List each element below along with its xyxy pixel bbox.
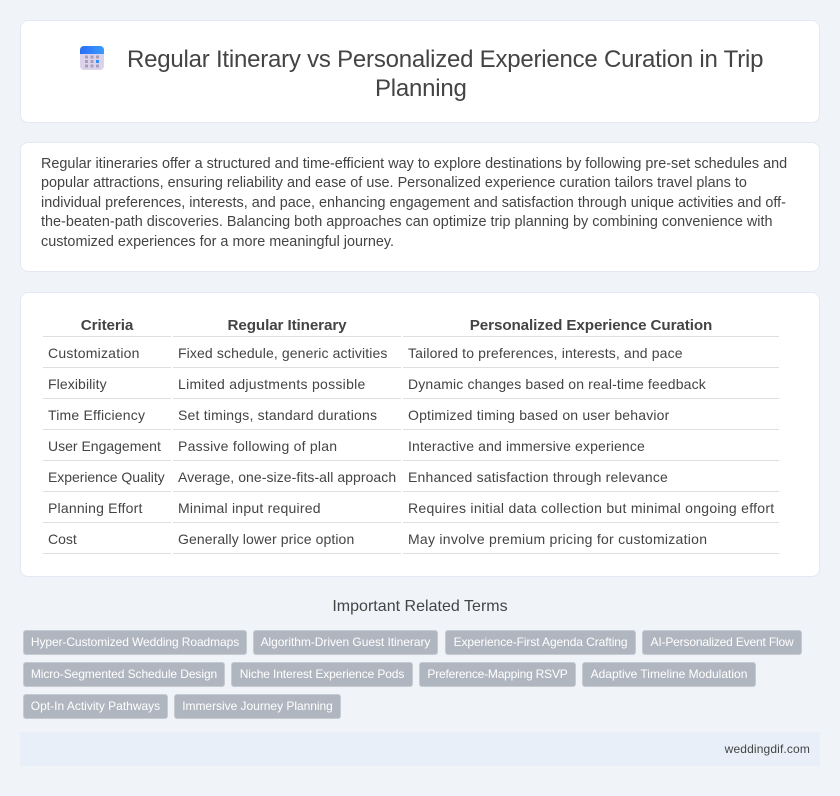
tag <box>174 694 341 719</box>
footer bar <box>20 732 820 766</box>
intro text block: the-beaten-path discoveries. Balancing both approaches can optimize trip planning by combining convenience with <box>41 214 772 230</box>
row: Flexibility: Dynamic changes based on real-time feedback <box>408 376 706 392</box>
row: Planning Effort: Minimal input required <box>178 500 321 516</box>
row: Experience Quality: Average, one-size-fits-all approach <box>178 469 396 485</box>
row: Planning Effort: Requires initial data collection but minimal ongoing effort <box>408 500 774 516</box>
intro text block <box>20 142 820 272</box>
row: Experience Quality: Enhanced satisfaction through relevance <box>408 469 668 485</box>
intro text block: customized experiences for a more meaningful journey. <box>41 234 394 250</box>
tag: Niche Interest Experience Pods <box>240 667 404 681</box>
tag group: related terms <box>23 630 802 719</box>
tag: Preference-Mapping RSVP <box>427 667 568 681</box>
tag <box>445 630 636 655</box>
title: Planning <box>375 75 467 102</box>
tag <box>642 630 802 655</box>
tag <box>231 662 413 687</box>
row: Customization: Customization <box>48 345 140 361</box>
tag: Algorithm-Driven Guest Itinerary <box>261 635 430 649</box>
tag: Micro-Segmented Schedule Design <box>31 667 217 681</box>
table header row <box>81 317 712 334</box>
intro text block: Regular itineraries offer a structured and time-efficient way to explore destinations by following pre-set schedules and <box>41 156 787 172</box>
tag <box>253 630 438 655</box>
tag <box>419 662 576 687</box>
row: Cost: Generally lower price option <box>178 531 354 547</box>
row: Customization: Tailored to preferences, interests, and pace <box>408 345 683 361</box>
row: User Engagement: User Engagement <box>48 438 161 454</box>
row: Cost <box>48 531 707 547</box>
tag <box>23 694 168 719</box>
tag: Opt-In Activity Pathways <box>31 699 160 713</box>
row: Planning Effort <box>48 500 774 516</box>
intro text block: popular attractions, ensuring reliability and ease of use. Personalized experience curation tailors travel plans to <box>41 175 747 191</box>
row: Planning Effort: Planning Effort <box>48 500 143 516</box>
row: Time Efficiency: Set timings, standard durations <box>178 407 377 423</box>
tag <box>23 662 225 687</box>
row: User Engagement: Passive following of plan <box>178 438 337 454</box>
title: Regular Itinerary vs Personalized Experience Curation in Trip <box>127 46 763 73</box>
row: Flexibility: Flexibility <box>48 376 107 392</box>
footer source text: weddingdif.com <box>725 742 810 756</box>
tag: Adaptive Timeline Modulation <box>591 667 747 681</box>
row: Customization <box>48 345 683 361</box>
table header row: Personalized Experience Curation <box>470 317 712 334</box>
intro text block: individual preferences, interests, and pace, enhancing engagement and satisfaction through unique activities and off- <box>41 195 786 211</box>
tag <box>23 630 247 655</box>
table header row: Regular Itinerary <box>228 317 346 334</box>
row: Experience Quality <box>48 469 668 485</box>
tag: AI-Personalized Event Flow <box>650 635 793 649</box>
heading: important related terms: Important Related Terms <box>332 598 508 615</box>
row: Cost: Cost <box>48 531 77 547</box>
row: Time Efficiency: Optimized timing based on user behavior <box>408 407 670 423</box>
tag: Hyper-Customized Wedding Roadmaps <box>31 635 239 649</box>
row: User Engagement <box>48 438 645 454</box>
title <box>127 46 763 102</box>
row: Flexibility: Limited adjustments possible <box>178 376 366 392</box>
table header row: Criteria <box>81 317 133 334</box>
panel: comparison table <box>20 292 820 577</box>
row: Experience Quality: Experience Quality <box>48 469 165 485</box>
row: Flexibility <box>48 376 706 392</box>
header card <box>20 20 820 123</box>
tag: Experience-First Agenda Crafting <box>454 635 627 649</box>
tag: Immersive Journey Planning <box>182 699 333 713</box>
row: User Engagement: Interactive and immersive experience <box>408 438 645 454</box>
row: Customization: Fixed schedule, generic activities <box>178 345 388 361</box>
row: Cost: May involve premium pricing for customization <box>408 531 707 547</box>
row: Time Efficiency <box>48 407 670 423</box>
icon: calendar <box>80 46 104 70</box>
row: Time Efficiency: Time Efficiency <box>48 407 145 423</box>
tag <box>582 662 756 687</box>
